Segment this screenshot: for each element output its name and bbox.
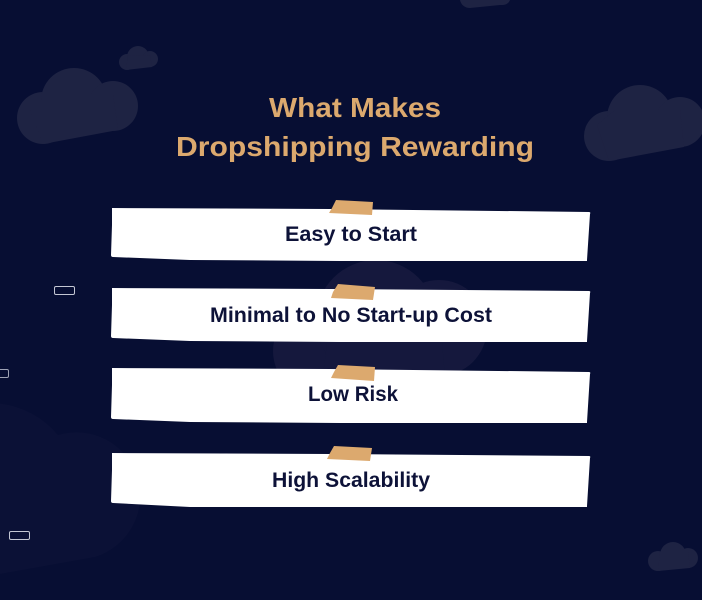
label: High Scalability	[272, 469, 430, 492]
tape	[327, 446, 372, 461]
icon: outlined dash lower	[10, 532, 30, 540]
tape	[331, 365, 375, 381]
title: Dropshipping Rewarding	[176, 131, 534, 162]
panel: Low Risk	[111, 365, 590, 423]
label: Minimal to No Start-up Cost	[210, 304, 492, 327]
icon: outlined dash upper	[54, 286, 74, 294]
icon: large cloud top right	[584, 85, 702, 161]
tape	[331, 284, 375, 300]
icon: small cloud top	[119, 46, 158, 70]
icon: faint cloud bottom left	[0, 404, 140, 574]
label: Low Risk	[308, 383, 398, 406]
panel: Easy to Start	[111, 200, 590, 261]
tape	[329, 200, 373, 215]
icon: large cloud top left	[17, 68, 138, 144]
title	[176, 92, 534, 162]
label: Easy to Start	[285, 223, 417, 246]
panel: High Scalability	[111, 446, 590, 507]
icon: small cloud bottom right	[648, 542, 698, 571]
panel: Minimal to No Start-up Cost	[111, 284, 590, 342]
title: What Makes	[269, 92, 441, 123]
icon: outlined dash left edge	[0, 370, 8, 378]
icon: partial cloud at top edge	[460, 0, 510, 8]
icon: faint cloud centre	[273, 260, 487, 398]
